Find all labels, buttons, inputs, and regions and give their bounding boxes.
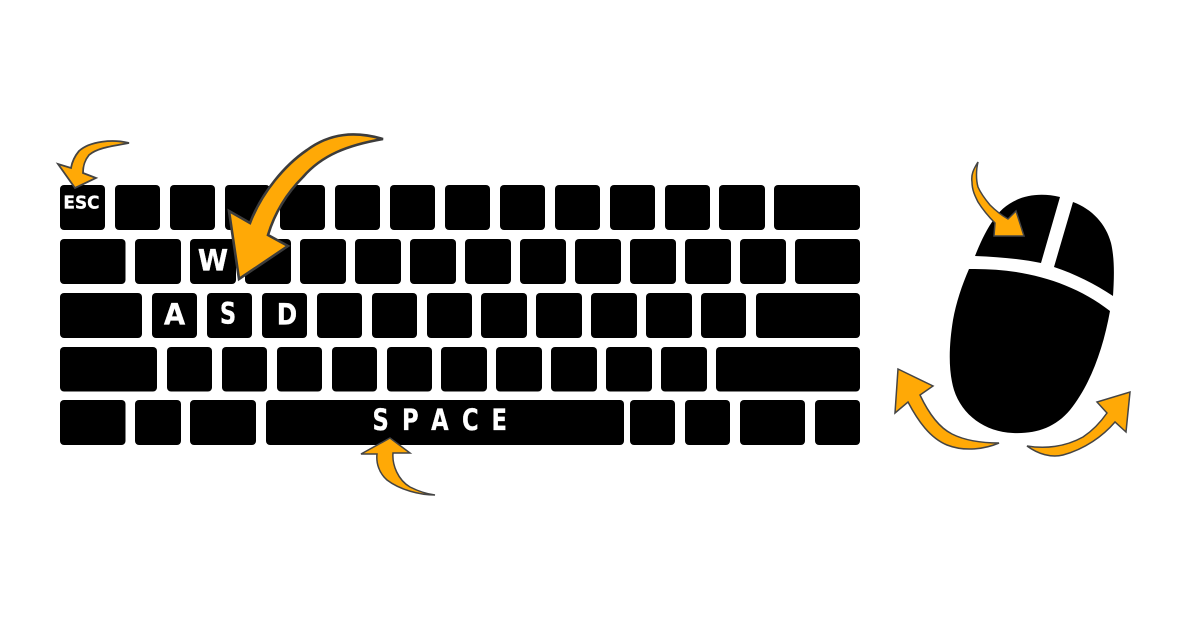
key row 4	[60, 347, 860, 392]
key label: S: S	[220, 298, 236, 331]
mouse body	[950, 269, 1110, 433]
arrow: to left mouse button	[972, 162, 1024, 236]
mouse	[950, 195, 1114, 433]
keyboard	[60, 185, 860, 445]
arrow: rotate mouse right	[1027, 392, 1130, 456]
mouse right button	[1054, 202, 1114, 296]
arrow: to W key	[229, 134, 383, 279]
key row 1	[60, 185, 860, 230]
arrow: to space bar	[361, 438, 435, 495]
key row 5 with space bar	[60, 400, 860, 445]
key label: SPACE: SPACE	[372, 404, 507, 438]
key label: ESC: ESC	[63, 193, 100, 214]
key label: A: A	[164, 298, 185, 332]
key label: W: W	[198, 244, 228, 278]
arrow: to ESC key	[58, 141, 129, 188]
key row 3	[60, 293, 860, 338]
key label: D: D	[277, 299, 297, 332]
key row 2	[60, 239, 860, 284]
mouse left button	[975, 195, 1060, 263]
arrow: rotate mouse left	[895, 369, 999, 449]
